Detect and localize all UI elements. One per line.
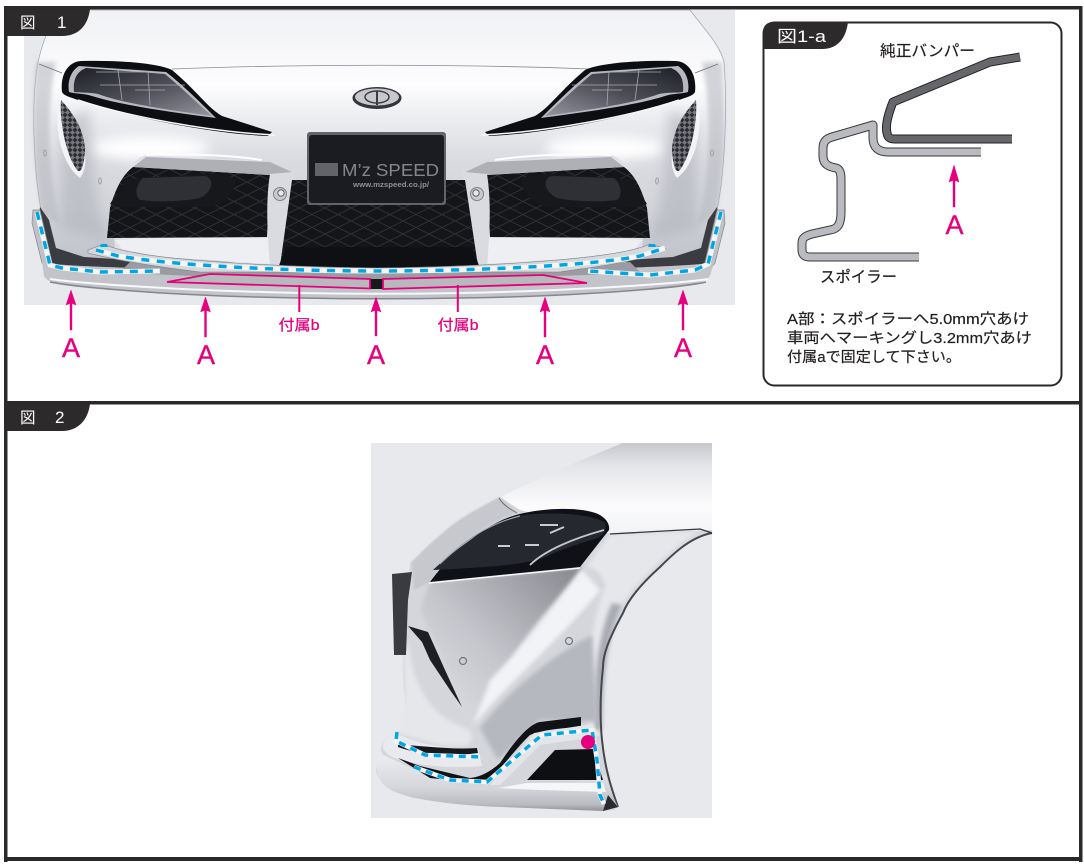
label: attachment b right: 付属b [438,317,478,334]
nose dark crease [408,626,462,707]
panel: figure 1 [24,10,1062,386]
center notch [370,279,383,289]
cyan dashed line: left wing [37,212,160,272]
headlight [429,498,712,583]
emblem [352,87,402,109]
instruction text: 車両へマーキングし3.2mm穴あけ [787,330,1032,347]
panel: figure 1-a detail [763,22,1062,386]
upper bumper strip [88,244,666,272]
hood [500,443,712,534]
tab: figure 1-a [763,22,848,49]
cyan dashed line: right wing [588,212,721,275]
tab: figure 1-a: 図1-a [777,28,827,46]
photo: front bumper with spoiler [24,10,735,305]
pink outline: attachment b left [167,274,370,288]
tab: figure 2: 2 [55,408,64,427]
instruction text: A部：スポイラーへ5.0mm穴あけ [787,311,1029,328]
tab: figure 1 [7,9,90,36]
instruction text [787,311,1032,366]
arrow A detail: A [945,210,964,240]
sensors [460,658,466,664]
cyan dashed line: upper strip [96,244,665,271]
arrow A 1: A [62,333,80,363]
license plate [307,132,446,205]
instruction text: 付属aで固定して下さい。 [787,349,961,366]
photo: side view of spoiler [371,443,712,818]
pink outline: attachment b right [383,275,587,289]
tab: figure 1: 1 [57,13,66,32]
lower spoiler lip [377,755,618,811]
pink marker [581,735,595,749]
cross-section: spoiler [802,125,981,257]
arrow A 5 [674,290,692,363]
tab: figure 2: 図 [20,410,36,427]
arrow A 3: A [367,340,385,370]
arrow A 4 [536,297,554,370]
cyan dashes: upper lip [396,732,480,757]
label: attachment b left [278,285,320,334]
arrow A detail [945,165,964,240]
plate side [392,572,412,655]
heading: stock bumper: 純正バンパー [880,42,975,60]
panel: figure 2 [371,443,712,818]
arrow A 2 [197,297,215,370]
license plate: M’z SPEED [342,160,439,180]
lower black channel [398,717,581,783]
tab: figure 1: 図 [20,15,36,32]
arrow A 1 [62,290,80,363]
cross-section: bumper [886,57,1020,139]
upper bumper lip [383,733,482,767]
label: attachment b left: 付属b [278,317,320,334]
side duct [527,749,603,780]
arrow A 4: A [536,340,554,370]
spoiler lip [42,262,714,299]
label: spoiler: スポイラー [820,268,897,286]
tab: figure 2 [7,404,90,431]
arrow A 2: A [197,340,215,370]
label: attachment b right [438,285,478,334]
cyan dashes: spoiler line [414,730,604,804]
arrow A 5: A [674,333,692,363]
license plate: www.mzspeed.co.jp/ [352,182,429,189]
fender [586,531,700,735]
center grille [280,180,478,266]
arrow A 3 [367,297,385,370]
facet shading [420,567,582,725]
